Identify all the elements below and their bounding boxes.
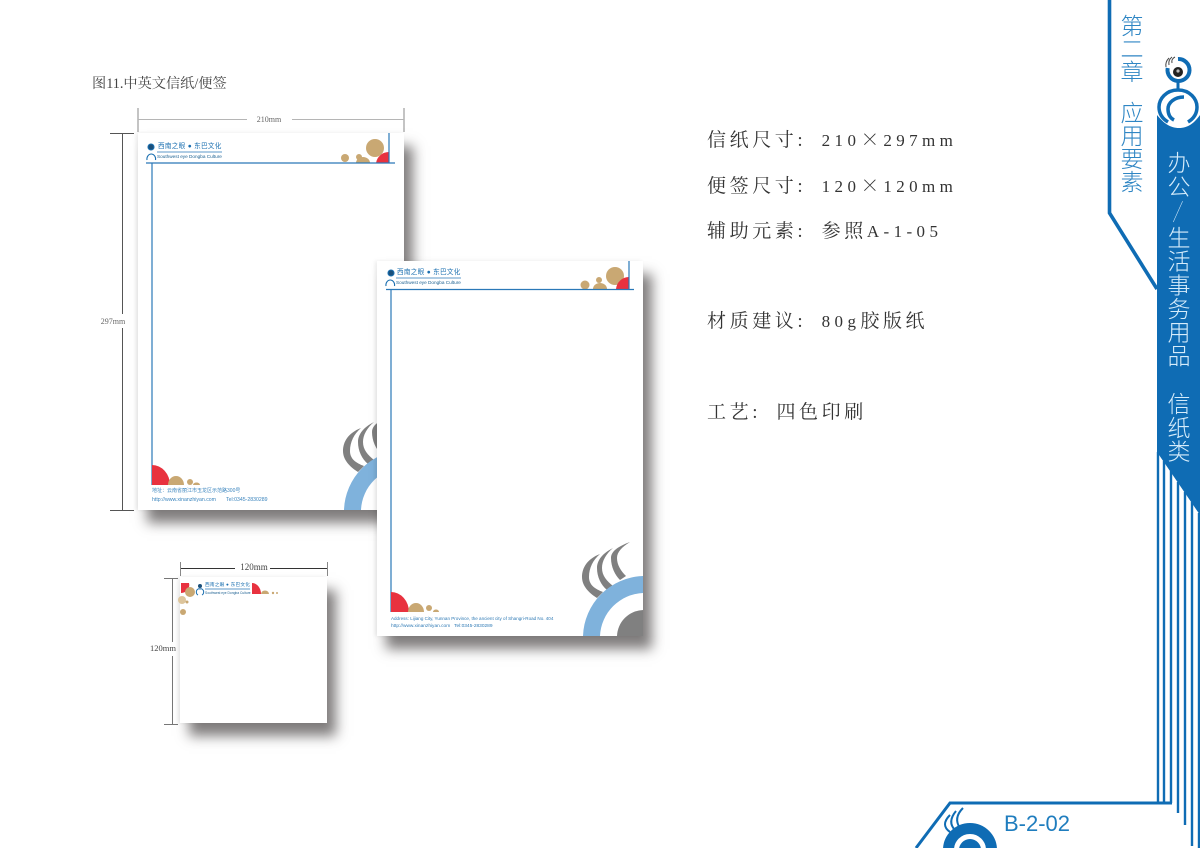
logo mark <box>386 270 395 286</box>
panel: Chinese letterhead: Southwest eye Dongba Culture <box>157 154 222 159</box>
spec: letter size: 信纸尺寸: 210×297mm <box>707 125 957 152</box>
panel: English letterhead: Southwest eye Dongba Culture <box>396 280 461 285</box>
panel: notepaper: Southwest eye Dongba Culture <box>205 591 251 595</box>
dimension: note height 120mm: 120mm <box>150 643 176 653</box>
dimension: note width 120mm: 120mm <box>240 562 268 572</box>
section title vertical: ／ <box>1171 200 1183 224</box>
panel: Chinese letterhead: http://www.xinanzhiyan.com Tel:0345-2830289 <box>152 497 268 503</box>
footer arcs and circles <box>152 416 404 510</box>
note header text: 西南之眼 ● 东巴文化 <box>205 582 250 587</box>
footer arcs and circles <box>391 542 643 636</box>
category title vertical: 信纸类 <box>1164 392 1190 463</box>
chapter title vertical: 第二章 <box>1117 14 1143 83</box>
panel: Chinese letterhead <box>138 133 404 510</box>
figure caption: 图11.中英文信纸/便签 <box>92 76 227 92</box>
header text: 西南之眼 ● 东巴文化 <box>158 143 222 150</box>
spec: material: 材质建议: 80g胶版纸 <box>707 311 928 332</box>
panel: notepaper <box>180 577 327 723</box>
panel: English letterhead: http://www.xinanzhiyan.com Tel:0345-2830289 <box>391 624 493 629</box>
note graphics: circles <box>178 583 278 615</box>
footer text: Address: Lijiang City, Yunnan Province, the ancient city of Shangri-Road No. 404 <box>391 616 553 621</box>
logo mark <box>147 144 156 160</box>
chapter subtitle vertical: 应用要素 <box>1117 101 1143 193</box>
dimension: letter height 297mm: 297mm <box>101 317 126 326</box>
page number: B-2-02 <box>1004 811 1070 836</box>
header text: 西南之眼 ● 东巴文化 <box>397 269 461 276</box>
spec: note size: 便签尺寸: 120×120mm <box>707 171 957 198</box>
letterhead graphics: circles and frame <box>146 133 395 485</box>
spec: auxiliary elements: 辅助元素: 参照A-1-05 <box>707 221 942 242</box>
spec: process: 工艺: 四色印刷 <box>707 402 867 423</box>
dimension: letter width 210mm: 210mm <box>257 115 282 124</box>
letterhead graphics: circles and frame <box>386 261 634 612</box>
footer text: 地址：云南省丽江市玉龙区示范路300号 <box>152 488 240 494</box>
section title vertical: 办公 生活事务用品 <box>1164 151 1190 367</box>
panel: English letterhead <box>377 261 643 636</box>
